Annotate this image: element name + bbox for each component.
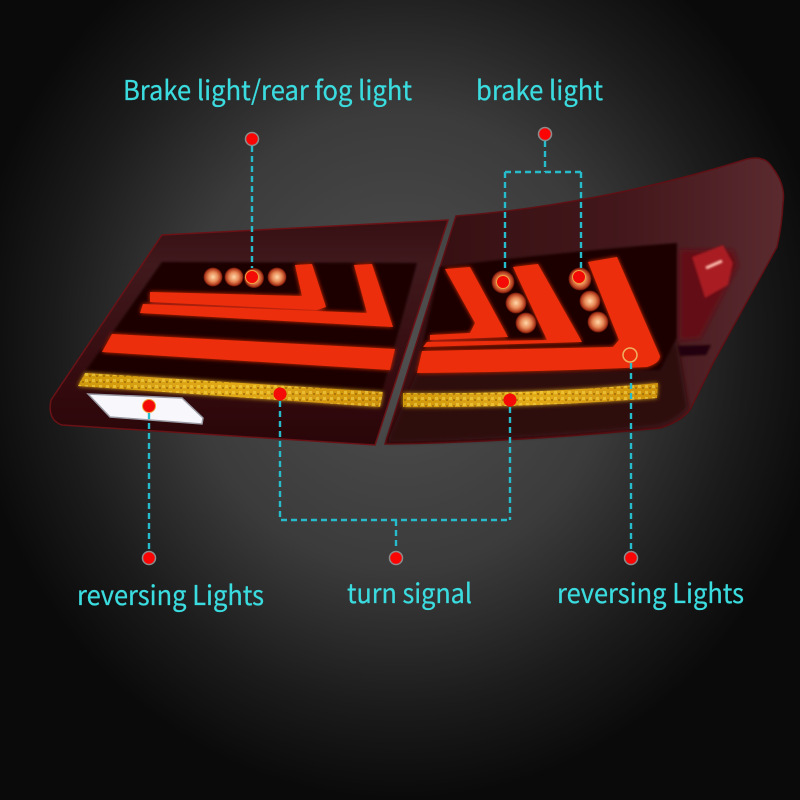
left lamp dark inner panel xyxy=(85,262,417,392)
marker dots at label ends xyxy=(142,128,638,564)
side reflector notch xyxy=(678,345,711,356)
right lamp lower band xyxy=(387,340,688,442)
label: brake light / rear fog light: Brake light/rear fog light xyxy=(123,69,412,108)
left lamp bulbs xyxy=(204,268,286,288)
right lamp dark inner panel xyxy=(416,243,677,374)
left lamp amber turn strip xyxy=(78,373,383,407)
right lamp bulbs xyxy=(492,268,608,334)
left lamp housing xyxy=(50,220,448,445)
right lamp housing xyxy=(385,158,784,444)
right lamp red light guides xyxy=(417,257,660,373)
label: brake light: brake light xyxy=(476,69,603,108)
right lamp amber turn strip xyxy=(403,383,658,407)
marker dots on lamps xyxy=(142,270,637,412)
left lamp red light guides xyxy=(102,264,395,370)
left reversing lamp lens xyxy=(88,394,203,424)
label: reversing lights right: reversing Lights xyxy=(557,572,744,611)
label: reversing lights left: reversing Lights xyxy=(77,574,264,613)
leader lines xyxy=(149,141,631,550)
right tail lamp xyxy=(385,158,784,444)
label: turn signal: turn signal xyxy=(347,572,472,611)
left tail lamp xyxy=(50,220,448,445)
side reflector xyxy=(680,250,738,340)
